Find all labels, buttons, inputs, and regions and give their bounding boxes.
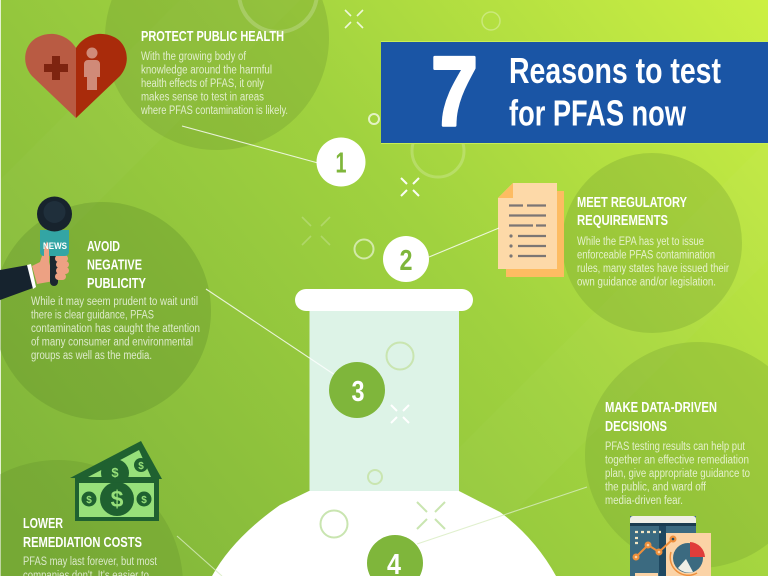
number 2 <box>383 236 429 282</box>
text: make data-driven body: the public, and ward off <box>605 482 707 494</box>
text: meet regulatory body <box>577 236 729 288</box>
icon: money bills: $ <box>138 461 144 472</box>
icon: money bills: $ <box>141 495 147 506</box>
text: make data-driven body: media-driven fear. <box>605 495 683 507</box>
heading: protect public health: PROTECT PUBLIC HEALTH <box>141 28 284 45</box>
number 4 <box>367 535 423 576</box>
text: meet regulatory body: While the EPA has yet to issue <box>577 236 704 248</box>
icon: money bills: $ <box>111 465 119 480</box>
text: meet regulatory body: enforceable PFAS contamination <box>577 250 715 262</box>
text: protect public health body: health effects of PFAS, it only <box>141 78 264 90</box>
flask neck <box>310 311 459 492</box>
text: lower remediation costs body <box>23 556 158 576</box>
heading: make data-driven decisions: DECISIONS <box>605 418 667 435</box>
title banner <box>381 36 768 146</box>
title text <box>509 50 721 134</box>
number 3 <box>329 362 385 418</box>
icon: money bills: $ <box>86 495 92 506</box>
number 3: 3 <box>352 376 364 408</box>
text: avoid negative publicity body: While it may seem prudent to wait until <box>31 296 198 308</box>
heading: avoid negative publicity: AVOID <box>87 238 120 255</box>
text: avoid negative publicity body: there is clear guidance, PFAS <box>31 310 154 322</box>
number 1 <box>316 138 366 186</box>
decorative rings and sparkles <box>302 10 500 258</box>
title number 7: 7 <box>431 36 478 146</box>
heading: make data-driven decisions: MAKE DATA-DRIVEN <box>605 399 717 416</box>
text: avoid negative publicity body: groups as well as the media. <box>31 350 152 362</box>
panel: protect public health <box>25 0 329 150</box>
panel: avoid negative publicity <box>0 196 211 420</box>
text: protect public health body: knowledge around the harmful <box>141 64 272 76</box>
heading: avoid negative publicity <box>87 238 146 292</box>
heading: lower remediation costs: LOWER <box>23 515 63 532</box>
icon: documents <box>498 183 564 277</box>
heading: lower remediation costs: REMEDIATION COSTS <box>23 534 142 551</box>
panel: lower remediation costs <box>0 441 183 576</box>
text: protect public health body: where PFAS contamination is likely. <box>140 105 288 117</box>
panel: make data-driven decisions <box>585 342 768 576</box>
icon: data dashboard <box>630 516 711 576</box>
icon: news microphone in hand: NEWS <box>43 241 67 252</box>
flask bubbles <box>320 342 445 538</box>
text: meet regulatory body: rules, many states have issued their <box>577 263 729 275</box>
connector lines <box>177 126 587 576</box>
text: avoid negative publicity body: contamination has caught the attention <box>31 323 200 335</box>
icon: news microphone in hand <box>0 196 72 300</box>
text: protect public health body: makes sense to test in areas <box>141 92 264 104</box>
text: lower remediation costs body: PFAS may last forever, but most <box>23 556 158 568</box>
text: meet regulatory body: own guidance and/or legislation. <box>577 276 716 288</box>
icon: money bills <box>70 441 162 521</box>
panel: meet regulatory requirements <box>498 153 742 333</box>
heading: lower remediation costs <box>23 515 142 551</box>
flask <box>212 289 556 576</box>
microphone hand fingers <box>55 255 69 280</box>
text: protect public health body: With the growing body of <box>141 51 247 63</box>
icon: money bills: $ <box>111 486 124 512</box>
number 2: 2 <box>400 245 412 277</box>
heading: meet regulatory requirements <box>577 194 687 229</box>
heading: make data-driven decisions <box>605 399 717 435</box>
heading: meet regulatory requirements: MEET REGULATORY <box>577 194 687 211</box>
flask body <box>212 491 556 576</box>
flask rim <box>295 289 473 311</box>
text: make data-driven body <box>605 441 750 507</box>
text: avoid negative publicity body <box>31 296 200 362</box>
text: protect public health body <box>140 51 288 117</box>
heading: avoid negative publicity: PUBLICITY <box>87 275 146 292</box>
title text: for PFAS now <box>509 92 687 134</box>
text: avoid negative publicity body: of many consumer and environmental <box>31 336 193 348</box>
heading: avoid negative publicity: NEGATIVE <box>87 256 142 274</box>
icon: heart with cross and person <box>25 34 127 118</box>
number 1: 1 <box>336 148 346 180</box>
heading: meet regulatory requirements: REQUIREMENTS <box>577 212 668 229</box>
text: make data-driven body: together an effective remediation <box>605 454 749 466</box>
